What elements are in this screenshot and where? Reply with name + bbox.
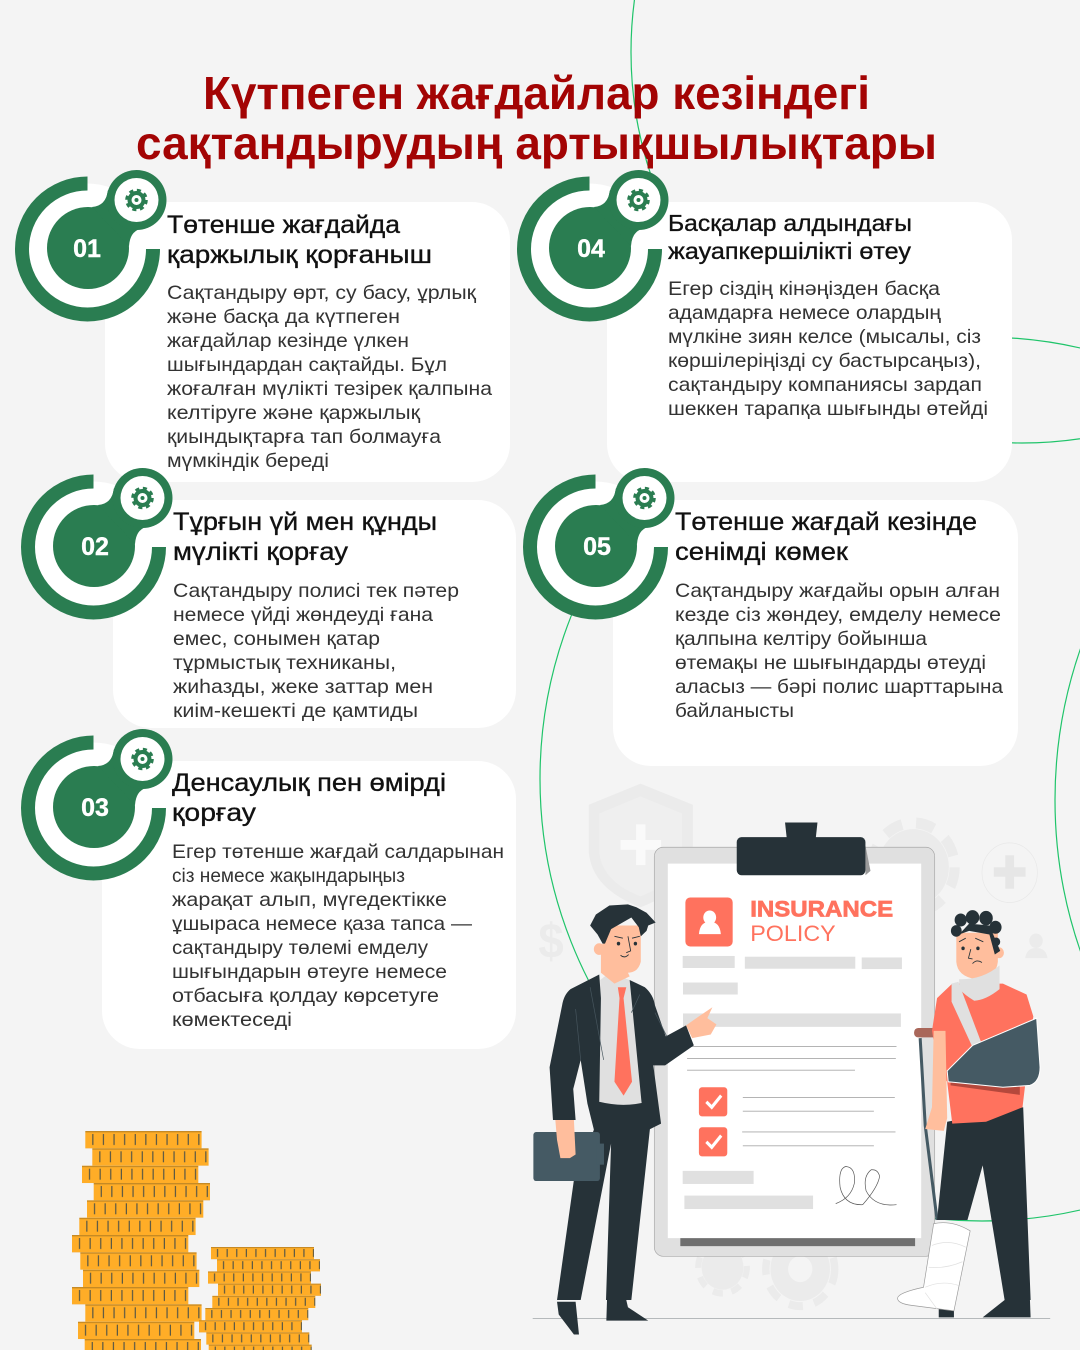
agent shoes bbox=[557, 1300, 648, 1334]
body text 02: тұрмыстық техниканы, bbox=[173, 652, 396, 674]
panel: 03 health and life bbox=[28, 729, 516, 1049]
body text 02: жиһазды, жеке заттар мен bbox=[173, 676, 433, 698]
agent figure bbox=[533, 904, 716, 1334]
badge 05: 05 bbox=[583, 533, 611, 561]
illustration: insurance policy scene bbox=[533, 784, 1050, 1334]
body text 04: Егер сіздің кінәңізден басқа bbox=[668, 278, 940, 300]
paper shadow bbox=[680, 1236, 915, 1246]
decorative green arcs bbox=[540, 0, 1080, 1262]
crutch bbox=[914, 1028, 946, 1220]
body text 03: Егер төтенше жағдай салдарынан bbox=[172, 841, 504, 863]
body text 04: сақтандыру компаниясы зардап bbox=[668, 374, 982, 396]
illustration: coin stacks bbox=[72, 1131, 321, 1350]
body text 05: кезде сіз жөндеу, емделу немесе bbox=[675, 604, 1001, 626]
agent legs bbox=[557, 1102, 650, 1300]
body text 01: қиындықтарға тап болмауға bbox=[167, 426, 441, 448]
short coin stack bbox=[199, 1247, 321, 1350]
body text 03: жарақат алып, мүгедектікке bbox=[172, 889, 447, 911]
placeholder bars bbox=[683, 956, 902, 1209]
body text 05: Сақтандыру жағдайы орын алған bbox=[675, 580, 1000, 602]
policy icon bbox=[685, 897, 733, 947]
paper sheet bbox=[668, 864, 921, 1238]
faded background icons bbox=[538, 784, 1048, 1306]
body text 01: шығындардан сақтайды. Бұл bbox=[167, 354, 447, 376]
body text 05 bbox=[675, 580, 1003, 722]
policy heading: POLICY bbox=[750, 920, 836, 946]
leg cast bbox=[898, 1223, 970, 1311]
heading 04 bbox=[668, 210, 912, 264]
heading 02: мүлікті қорғау bbox=[173, 538, 349, 566]
body text 02: немесе үйді жөндеуді ғана bbox=[173, 604, 433, 626]
policy heading bbox=[750, 896, 893, 946]
body text 03 bbox=[172, 841, 504, 1031]
card 05 background bbox=[613, 500, 1018, 766]
body text 01: жағдайлар кезінде үлкен bbox=[167, 330, 409, 352]
body text 03: шығындарын өтеуге немесе bbox=[172, 961, 447, 983]
body text 04: көршілеріңізді су бастырсаңыз), bbox=[668, 350, 981, 372]
agent pointing hand bbox=[686, 1007, 716, 1038]
neck collar bbox=[959, 965, 1000, 1001]
body text 01: келтіруге және қаржылық bbox=[167, 402, 421, 424]
cast folds bbox=[925, 1243, 966, 1309]
clipboard clip bbox=[737, 823, 871, 875]
badge 03 bbox=[28, 729, 172, 874]
body text 03: көмектеседі bbox=[172, 1009, 292, 1031]
panel: 05 reliable help bbox=[530, 468, 1018, 766]
badge 02: 02 bbox=[81, 533, 109, 561]
body text 05: өтемақы не шығындарды өтеуді bbox=[675, 652, 986, 674]
card 02 background bbox=[113, 500, 516, 728]
heading 01 bbox=[167, 211, 432, 269]
clipboard board bbox=[654, 847, 935, 1256]
body text 02: Сақтандыру полисі тек пәтер bbox=[173, 580, 459, 602]
badge 02 bbox=[28, 468, 172, 612]
body text 01: мүмкіндік береді bbox=[167, 450, 329, 472]
body text 04: мүлкіне зиян келсе (мысалы, сіз bbox=[668, 326, 981, 348]
body text 01 bbox=[167, 282, 492, 472]
agent lower hand bbox=[555, 1120, 576, 1158]
signature bbox=[836, 1167, 897, 1205]
heading 02: Тұрғын үй мен құнды bbox=[173, 508, 437, 536]
badge 04: 04 bbox=[577, 235, 605, 263]
man head bbox=[951, 910, 1004, 979]
heading 01: Төтенше жағдайда bbox=[167, 211, 400, 239]
man shoe bbox=[939, 1300, 1031, 1317]
badge 04 bbox=[524, 170, 668, 315]
injured man figure bbox=[898, 910, 1040, 1317]
arm sling bbox=[947, 1018, 1040, 1087]
card 01 background bbox=[105, 202, 510, 482]
placeholder lines bbox=[687, 1047, 897, 1146]
agent jacket seams bbox=[576, 987, 667, 1060]
body text 02 bbox=[173, 580, 459, 722]
badge 01: 01 bbox=[73, 235, 101, 263]
body text 03: отбасыға қолдау көрсетуге bbox=[172, 985, 439, 1007]
sling strap bbox=[952, 982, 981, 1047]
checkboxes bbox=[699, 1087, 727, 1156]
body text 03: сақтандыру төлемі емделу bbox=[172, 937, 428, 959]
body text 05: аласыз — бәрі полис шарттарына bbox=[675, 676, 1003, 698]
policy heading: INSURANCE bbox=[750, 896, 893, 922]
body text 01: және басқа да күтпеген bbox=[167, 306, 400, 328]
heading 03: Денсаулық пен өмірді bbox=[172, 769, 446, 797]
card 04 background bbox=[607, 202, 1012, 482]
man arm bbox=[925, 1031, 947, 1131]
card 03 background bbox=[102, 761, 516, 1049]
heading 03 bbox=[172, 769, 446, 827]
body text 04: шеккен тарапқа шығынды өтейді bbox=[668, 398, 988, 420]
body text 04: адамдарға немесе олардың bbox=[668, 302, 941, 324]
ground line bbox=[533, 1317, 1050, 1319]
sling shadow bbox=[951, 1082, 1020, 1095]
body text 05: байланысты bbox=[675, 700, 794, 722]
agent shirt bbox=[599, 973, 642, 1105]
heading 04: Басқалар алдындағы bbox=[668, 210, 912, 236]
heading 05: сенімді көмек bbox=[675, 538, 849, 566]
body text 03: ұшыраса немесе қаза тапса — bbox=[172, 913, 473, 935]
body text 01: Сақтандыру өрт, су басу, ұрлық bbox=[167, 282, 477, 304]
agent tie bbox=[614, 987, 632, 1096]
agent head bbox=[590, 904, 656, 984]
title bbox=[136, 67, 937, 169]
body text 04 bbox=[668, 278, 988, 420]
body text 01: жоғалған мүлікті тезірек қалпына bbox=[167, 378, 492, 400]
body text 02: киім-кешекті де қамтиды bbox=[173, 700, 418, 722]
man shirt bbox=[932, 984, 1033, 1124]
man legs bbox=[937, 1107, 1031, 1300]
heading 05: Төтенше жағдай кезінде bbox=[675, 508, 977, 536]
tall coin stack bbox=[72, 1131, 210, 1350]
heading 03: қорғау bbox=[172, 799, 257, 827]
panel: 02 home and property bbox=[28, 468, 516, 728]
heading 04: жауапкершілікті өтеу bbox=[668, 238, 911, 264]
panel: 04 liability to others bbox=[524, 170, 1012, 482]
faded background icons: $ bbox=[538, 915, 564, 970]
agent folder bbox=[533, 1132, 604, 1181]
badge 05 bbox=[530, 468, 674, 612]
body text 03: сіз немесе жақындарыңыз bbox=[172, 865, 405, 887]
body text 02: емес, сонымен қатар bbox=[173, 628, 380, 650]
heading 02 bbox=[173, 508, 437, 566]
badge 01 bbox=[22, 170, 166, 315]
heading 05 bbox=[675, 508, 977, 566]
heading 01: қаржылық қорғаныш bbox=[167, 241, 432, 269]
agent jacket bbox=[550, 975, 694, 1131]
body text 05: қалпына келтіру бойынша bbox=[675, 628, 927, 650]
title: Күтпеген жағдайлар кезіндегі bbox=[203, 67, 870, 119]
badge 03: 03 bbox=[81, 794, 109, 822]
title: сақтандырудың артықшылықтары bbox=[136, 117, 937, 169]
panel: 01 financial protection bbox=[22, 170, 510, 482]
